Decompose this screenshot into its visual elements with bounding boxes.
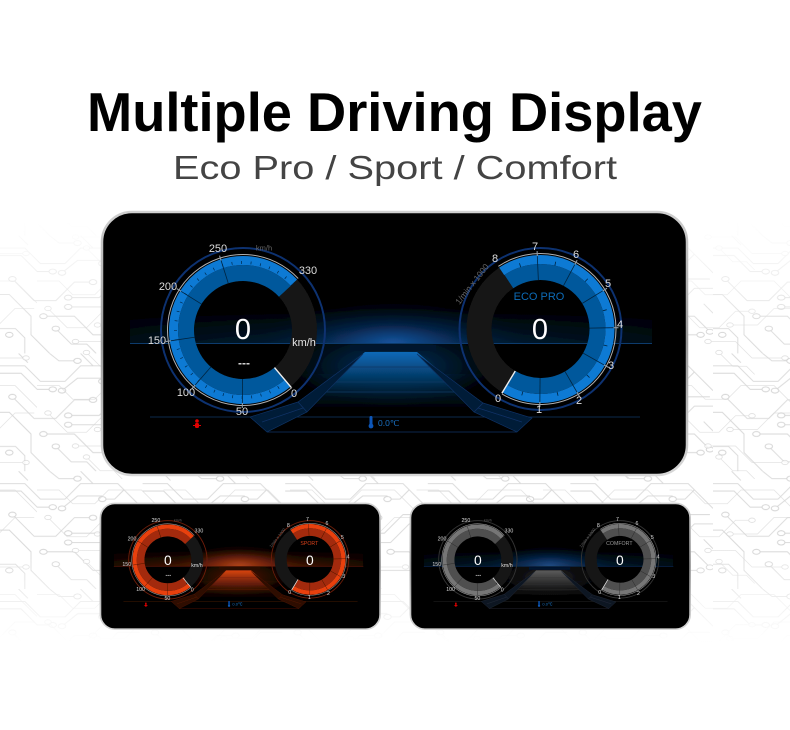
rpm gauge labels: 1/min x 1000: [268, 527, 287, 549]
rpm gauge labels: 0: [306, 552, 314, 568]
speed gauge labels: [122, 518, 203, 602]
rpm gauge labels: 0: [532, 314, 548, 346]
rpm gauge labels: 3: [652, 574, 655, 580]
rpm gauge labels: 8: [287, 523, 290, 529]
speed gauge labels: 200: [128, 536, 136, 542]
speed gauge labels: 100: [177, 387, 195, 399]
rpm gauge labels: 4: [657, 554, 660, 560]
speed gauge labels: ---: [475, 573, 481, 579]
rpm gauge labels: 1: [618, 595, 621, 601]
icon: seatbelt warning: [454, 602, 458, 607]
speed gauge labels: 200: [159, 281, 177, 293]
rpm gauge labels: 2: [637, 591, 640, 597]
rpm gauge labels: 0: [616, 552, 624, 568]
rpm gauge labels: 3: [608, 360, 614, 372]
rpm gauge labels: 7: [532, 241, 538, 253]
speed gauge labels: 0: [501, 587, 504, 593]
speed gauge labels: 0: [291, 388, 297, 400]
speed gauge labels: km/h: [501, 563, 513, 569]
speed gauge labels: 250: [209, 243, 227, 255]
rpm gauge labels: 0: [495, 393, 501, 405]
speed gauge labels: 0: [164, 552, 172, 568]
speed gauge labels: 0: [191, 587, 194, 593]
icon: seatbelt warning: [144, 602, 148, 607]
temperature readout: [369, 416, 400, 428]
rpm gauge labels: 6: [326, 521, 329, 527]
rpm gauge labels: 4: [617, 319, 623, 331]
speed gauge labels: ---: [238, 356, 250, 370]
temperature readout: 0.0℃: [232, 602, 243, 607]
rpm gauge labels: [453, 241, 623, 416]
speed gauge: [427, 509, 529, 611]
rpm gauge labels: 5: [341, 535, 344, 541]
rpm gauge labels: [268, 517, 350, 601]
rpm gauge labels: 2: [327, 591, 330, 597]
temperature readout: [538, 601, 553, 607]
speed gauge labels: 100: [136, 587, 145, 593]
speed gauge labels: 330: [299, 265, 317, 277]
rpm gauge labels: 1: [536, 404, 542, 416]
icon: seatbelt warning: [193, 419, 201, 428]
rpm gauge labels: 5: [605, 278, 611, 290]
rpm gauge labels: ECO PRO: [514, 291, 565, 303]
road: [123, 570, 358, 609]
rpm gauge labels: 4: [347, 554, 350, 560]
rpm gauge: [436, 224, 645, 434]
speed gauge labels: 150: [148, 335, 166, 347]
temperature readout: 0.0℃: [542, 602, 553, 607]
rpm gauge labels: 0: [288, 590, 291, 596]
speed gauge labels: 330: [195, 529, 203, 535]
panel: comfort display: [410, 503, 690, 629]
temperature readout: [228, 601, 243, 607]
speed gauge labels: 250: [462, 518, 470, 524]
speed gauge labels: km/h: [484, 519, 492, 523]
speed gauge labels: 200: [438, 536, 446, 542]
speed gauge labels: [148, 243, 317, 418]
subtitle: Eco Pro / Sport / Comfort: [173, 149, 617, 186]
rpm gauge labels: 3: [342, 574, 345, 580]
speed gauge labels: 250: [152, 518, 160, 524]
speed gauge labels: 330: [505, 529, 513, 535]
speed gauge labels: 150: [122, 562, 131, 568]
rpm gauge labels: [578, 517, 660, 601]
speed gauge labels: km/h: [256, 244, 272, 252]
speed gauge labels: 0: [474, 552, 482, 568]
speed gauge labels: [432, 518, 513, 602]
speed gauge labels: 100: [446, 587, 455, 593]
rpm gauge labels: 1: [308, 595, 311, 601]
speed gauge labels: ---: [165, 573, 171, 579]
rpm gauge labels: 6: [573, 249, 579, 261]
speed gauge labels: 50: [164, 596, 170, 602]
rpm gauge labels: 8: [597, 523, 600, 529]
rpm gauge labels: SPORT: [300, 541, 319, 547]
panel: sport display: [100, 503, 380, 629]
rpm gauge labels: 2: [576, 395, 582, 407]
speed gauge labels: km/h: [292, 337, 316, 349]
road: [150, 352, 640, 432]
rpm gauge: [570, 509, 670, 609]
speed gauge: [117, 509, 219, 611]
speed gauge labels: 150: [432, 562, 441, 568]
speed gauge labels: 50: [236, 406, 248, 418]
title: Multiple Driving Display: [87, 81, 702, 143]
rpm gauge labels: 0: [598, 590, 601, 596]
temperature readout: 0.0℃: [378, 418, 400, 428]
road: [433, 570, 668, 609]
rpm gauge: [260, 509, 360, 609]
speed gauge labels: 0: [235, 314, 251, 346]
rpm gauge labels: 1/min x 1000: [453, 262, 491, 306]
speed gauge labels: 50: [474, 596, 480, 602]
rpm gauge labels: 7: [616, 517, 619, 523]
panel: eco pro display: [102, 212, 687, 475]
rpm gauge labels: 7: [306, 517, 309, 523]
rpm gauge labels: 6: [636, 521, 639, 527]
speed gauge labels: km/h: [174, 519, 182, 523]
rpm gauge labels: COMFORT: [606, 541, 633, 547]
rpm gauge labels: 1/min x 1000: [578, 527, 597, 549]
rpm gauge labels: 5: [651, 535, 654, 541]
speed gauge: [137, 224, 349, 436]
rpm gauge labels: 8: [492, 253, 498, 265]
speed gauge labels: km/h: [191, 563, 203, 569]
circuit board background: [0, 248, 790, 624]
